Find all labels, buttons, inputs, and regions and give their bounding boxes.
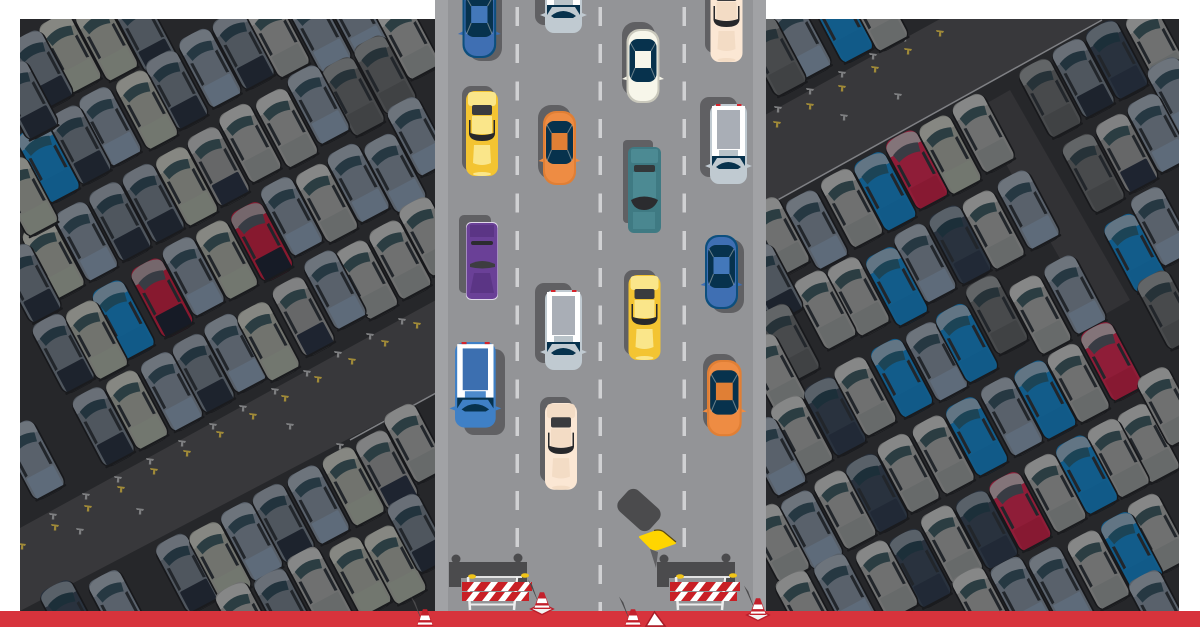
car: yellow convertible centre [624,270,660,360]
traffic cone bottom right [744,586,769,621]
traffic cone bottom left [411,597,433,626]
car: orange sedan middle [538,105,580,185]
car: purple muscle car [459,215,498,300]
car: white sedan [622,22,664,103]
car: silver van centre [535,283,587,370]
panel: road [435,0,766,611]
car: silver van top [535,0,587,33]
car: blue sedan top left [458,0,502,61]
panel: left parking lot photo [20,19,435,611]
car: orange sedan bottom right [702,354,746,436]
traffic cone on road [528,580,553,615]
barricade right [657,554,740,610]
car: blue sedan right [700,235,744,313]
car: yellow convertible left [462,86,498,176]
traffic cone bottom centre [619,597,641,626]
car: silver van right [700,97,752,184]
car: blue van [450,342,505,435]
panel: right parking lot photo [766,19,1179,611]
footer band [0,611,1200,627]
barricade left [449,554,532,610]
car: teal pickup [623,140,661,233]
car: cream convertible top right [705,0,742,62]
car: cream convertible bottom [540,397,577,490]
road sign: fallen yellow sign and shadow [614,486,676,568]
warning triangle [646,612,665,626]
